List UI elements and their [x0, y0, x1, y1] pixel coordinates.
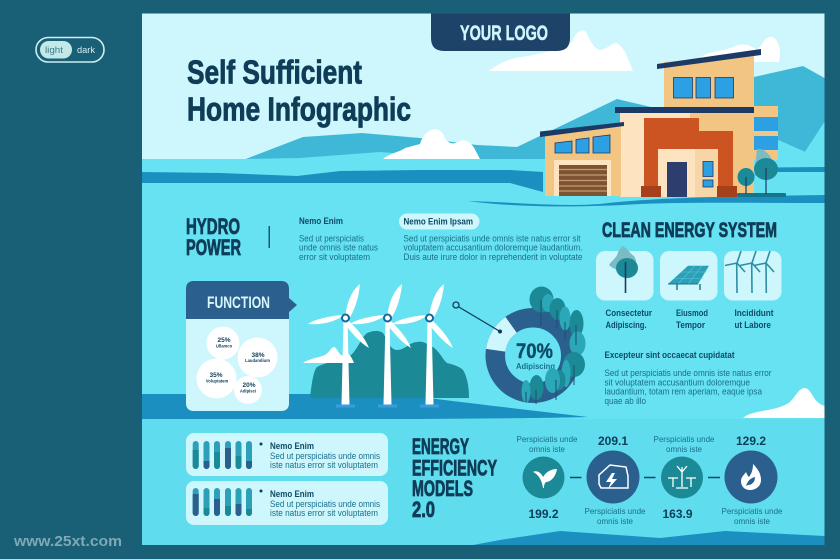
card: nemo enim 2: Sed ut perspiciatis unde omnis: [270, 499, 380, 509]
bar gauges 2: [193, 488, 252, 516]
panel: function: 25%: [217, 337, 231, 344]
card: nemo enim 1: [186, 433, 388, 476]
model 4: flame: omnis iste: [734, 516, 770, 526]
icon labels: Consectetur: [606, 308, 652, 318]
logo tab: [431, 14, 570, 51]
icon tile: tree: [596, 246, 654, 300]
text block: nemo enim: error sit voluptatem: [299, 252, 370, 262]
model 4: flame: [722, 434, 783, 526]
panel: function: 20%: [242, 382, 256, 389]
connectors: [570, 476, 720, 478]
card: nemo enim 1: Sed ut perspiciatis unde omnis: [270, 451, 380, 461]
card: nemo enim 2: [186, 481, 388, 525]
text block: nemo enim ipsam: voluptatem accusantium doloremque laudantium.: [404, 242, 582, 252]
bar gauges 1: [193, 441, 252, 469]
icon labels: Eiusmod: [676, 308, 708, 318]
illustration: wind turbines with hill: [303, 284, 469, 408]
icon labels: Tempor: [676, 320, 705, 330]
model 1: leaf: Perspiciatis unde: [516, 434, 578, 444]
card: nemo enim 2: Nemo Enim: [270, 489, 314, 499]
chart: donut 70 percent: Adipiscing: [516, 361, 555, 371]
model 2: solar home: omnis iste: [597, 516, 633, 526]
chart: donut 70 percent: [453, 286, 586, 404]
heading: energy efficiency models: 2.0: [412, 497, 435, 522]
icon tile: solar panel: [660, 251, 718, 300]
text block: excepteur: Sed ut perspiciatis unde omnis iste natus error: [604, 368, 772, 378]
clouds: [383, 30, 824, 418]
title: [187, 54, 411, 128]
heading: hydro power: POWER: [186, 235, 241, 260]
text block: nemo enim: [299, 216, 378, 262]
text block: nemo enim: Sed ut perspiciatis: [299, 234, 364, 244]
text block: nemo enim ipsam: Sed ut perspiciatis unde omnis iste natus error sit: [404, 234, 581, 244]
heading: energy efficiency models: ENERGY: [412, 434, 469, 459]
model 1: leaf: 199.2: [528, 507, 559, 521]
text block: excepteur: Excepteur sint occaecat cupidatat: [604, 350, 734, 360]
text block: nemo enim ipsam: Nemo Enim Ipsam: [404, 216, 473, 226]
turbine 3: [392, 284, 453, 408]
turbine 2: [350, 284, 411, 408]
model 2: solar home: [584, 434, 646, 526]
panel: function: Laudandium: [245, 358, 270, 363]
theme toggle: light: [45, 45, 63, 56]
card: nemo enim 1: iste natus error sit voluptatem: [270, 460, 378, 470]
text block: excepteur: [604, 350, 772, 406]
panel: function: [186, 281, 297, 411]
text block: nemo enim ipsam: [399, 214, 582, 262]
panel: function: Voluptatem: [206, 378, 229, 384]
model 3: turbines: Perspiciatis unde: [654, 434, 715, 444]
model 4: flame: Perspiciatis unde: [722, 506, 783, 516]
heading: hydro power: [186, 214, 241, 260]
text block: excepteur: sit voluptatem accusantium doloremque: [604, 378, 750, 388]
panel: function: FUNCTION: [207, 294, 270, 312]
turbine 1: [308, 284, 369, 408]
heading: energy efficiency models: EFFICIENCY: [412, 456, 497, 480]
icon labels: ut Labore: [734, 320, 771, 330]
card: nemo enim 1: Nemo Enim: [270, 441, 314, 451]
model 2: solar home: Perspiciatis unde: [584, 506, 646, 516]
panel: function: 35%: [209, 372, 223, 379]
text block: excepteur: laudantium, totam rem aperiam, eaque ipsa: [604, 386, 762, 396]
icon tile: wind turbines: [724, 251, 782, 300]
theme toggle: dark: [77, 45, 95, 56]
logo tab: YOUR LOGO: [460, 22, 548, 45]
icon labels: Incididunt: [734, 308, 774, 318]
model 1: leaf: [516, 434, 578, 521]
text block: nemo enim: unde omnis iste natus: [299, 242, 378, 252]
panel: function: Ullamco: [216, 344, 233, 348]
text block: excepteur: quae ab illo: [604, 396, 646, 406]
model 3: turbines: [654, 434, 715, 521]
icon labels: Adipiscing.: [606, 320, 646, 330]
text block: nemo enim ipsam: Duis aute irure dolor in reprehenderit in voluptate: [404, 252, 582, 262]
heading: hydro power: HYDRO: [186, 214, 240, 239]
model 3: turbines: 163.9: [662, 507, 693, 521]
title: Home Infographic: [187, 90, 411, 128]
model 2: solar home: 209.1: [598, 434, 628, 448]
heading: energy efficiency models: MODELS: [412, 476, 473, 501]
model 1: leaf: omnis iste: [529, 444, 565, 454]
text block: nemo enim: Nemo Enim: [299, 216, 343, 226]
watermark: www.25xt.com: [13, 534, 122, 550]
trees on donut: [522, 286, 586, 404]
illustration: trees by house: [737, 149, 786, 197]
chart: donut 70 percent: 70%: [516, 340, 553, 363]
model 4: flame: 129.2: [736, 434, 766, 448]
panel: function: Adipisci: [240, 388, 256, 394]
card: nemo enim 2: iste natus error sit voluptatem: [270, 508, 378, 518]
icon labels: [606, 308, 774, 330]
panel: function: 38%: [251, 352, 265, 359]
pointer: [453, 302, 502, 334]
heading: energy efficiency models: [412, 434, 497, 522]
model 3: turbines: omnis iste: [666, 444, 702, 454]
panel: landscape background: [142, 14, 824, 545]
title: Self Sufficient: [187, 54, 362, 90]
illustration: house: [540, 49, 786, 197]
theme toggle: [36, 38, 104, 62]
